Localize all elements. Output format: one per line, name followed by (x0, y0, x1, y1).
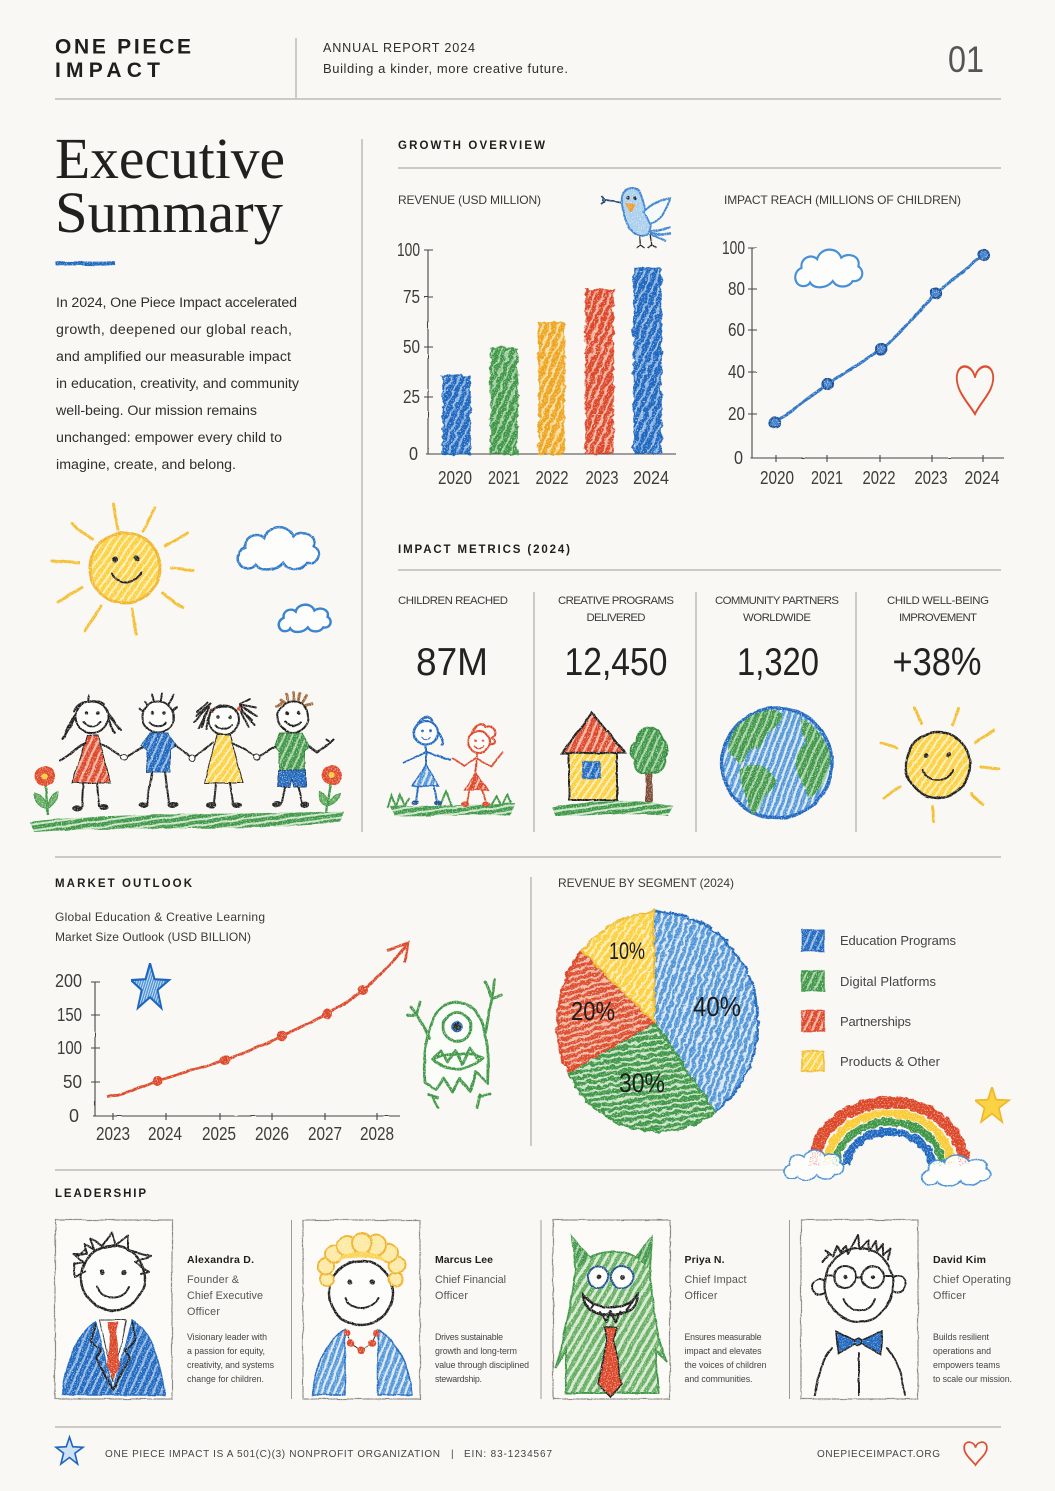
portrait: David (801, 1220, 918, 1399)
axis labels: 2027 (308, 1124, 342, 1144)
icon: chart cloud (795, 250, 862, 287)
growth curve with arrow (107, 943, 408, 1097)
footer separator: | (451, 1449, 454, 1460)
heading: revenue by segment: REVENUE BY SEGMENT (2024) (558, 876, 734, 890)
metric: well-being improvement: CHILD WELL-BEING (887, 595, 989, 607)
executive summary paragraph: in education, creativity, and community (56, 376, 300, 392)
icon: house and tree (552, 713, 673, 816)
axis labels: 100 (57, 1038, 82, 1058)
legend: Partnerships (840, 1014, 912, 1029)
metric: community partners: COMMUNITY PARTNERS (715, 595, 839, 607)
axis labels (55, 971, 394, 1144)
metric: children reached: CHILDREN REACHED (398, 595, 508, 607)
axis labels: 2028 (360, 1124, 394, 1144)
line chart: market outlook (55, 943, 408, 1144)
illustration: children holding hands (30, 692, 345, 832)
axis labels: 2024 (148, 1124, 182, 1144)
pie percentages (571, 938, 741, 1098)
metric: creative programs delivered: CREATIVE PROGRAMS (558, 595, 674, 607)
bars (443, 269, 661, 454)
market chart subtitle: Market Size Outlook (USD BILLION) (55, 930, 251, 944)
icon: smiling sun (52, 504, 193, 634)
organisation logo wordmark: IMPACT (55, 59, 160, 82)
metric: creative programs delivered: DELIVERED (586, 612, 646, 624)
text: David: Builds resilient (933, 1332, 990, 1342)
pie slices (557, 912, 758, 1131)
icon: blue star (131, 963, 169, 1008)
axis labels: 2024 (964, 468, 1000, 488)
leader card: Priya N. (553, 1220, 767, 1399)
organisation logo wordmark (55, 36, 191, 82)
heading: market outlook: MARKET OUTLOOK (55, 878, 193, 890)
footer website: ONEPIECEIMPACT.ORG (817, 1449, 940, 1460)
text: Alexandra: Founder & (187, 1274, 240, 1286)
executive summary paragraph: growth, deepened our global reach, (56, 322, 292, 338)
axis labels: 80 (728, 279, 745, 299)
axis labels: 0 (409, 444, 418, 464)
pie chart: revenue by segment (557, 912, 758, 1131)
report subtitle: ANNUAL REPORT 2024 (323, 41, 475, 55)
axis labels: 2024 (633, 468, 669, 488)
axis labels: 2020 (438, 468, 472, 488)
axis labels: 2023 (586, 468, 618, 488)
report subtitle: Building a kinder, more creative future. (323, 61, 568, 76)
axis labels: 60 (728, 320, 745, 340)
axes (424, 250, 676, 454)
metric: community partners: 1,320 (737, 641, 819, 684)
text: Alexandra (187, 1254, 275, 1384)
text: Marcus: stewardship. (435, 1374, 482, 1384)
market chart subtitle: Global Education & Creative Learning (55, 910, 265, 924)
pie percentages: 40% (693, 991, 741, 1022)
text: Priya: Officer (684, 1290, 718, 1302)
metric: creative programs delivered (552, 595, 674, 816)
text: Marcus: growth and long-term (435, 1346, 517, 1356)
axis labels: 2021 (488, 468, 520, 488)
icon: one-eyed green monster (407, 980, 502, 1107)
icon: rainbow clouds (784, 1150, 990, 1186)
icon: two stick children on grass (388, 717, 515, 816)
metric: community partners (715, 595, 839, 818)
axis labels: 0 (69, 1106, 79, 1126)
legend (802, 930, 956, 1071)
axis labels: 2020 (760, 468, 794, 488)
icon: footer star (56, 1437, 83, 1464)
axis labels: 75 (403, 287, 420, 307)
child two in blue shirt (125, 694, 192, 808)
text: Alexandra: change for children. (187, 1374, 264, 1384)
axis labels: 100 (722, 238, 745, 258)
child three in yellow dress (193, 699, 257, 808)
text: Marcus (435, 1254, 529, 1384)
axis labels: 150 (57, 1005, 82, 1025)
text: David: David Kim (933, 1254, 986, 1266)
executive summary paragraph: unchanged: empower every child to (56, 430, 282, 446)
icon: blue bird (601, 188, 671, 248)
icon: large cloud (238, 527, 319, 570)
metric: well-being improvement: IMPROVEMENT (899, 612, 977, 624)
footer EIN: EIN: 83-1234567 (464, 1449, 552, 1460)
axis labels: 25 (403, 387, 420, 407)
child four in green shirt (257, 692, 333, 808)
header (55, 36, 984, 98)
icon: small cloud (279, 605, 331, 632)
grass strip (30, 811, 345, 832)
text: Priya: impact and elevates (684, 1346, 762, 1356)
pie percentages: 20% (571, 996, 615, 1026)
text: David: to scale our mission. (933, 1374, 1012, 1384)
title (55, 126, 285, 245)
axis labels: 200 (55, 971, 82, 991)
legend: Digital Platforms (840, 974, 936, 989)
text: David: Chief Operating (933, 1274, 1011, 1286)
text: Marcus: Marcus Lee (435, 1254, 493, 1266)
text: Priya (684, 1254, 767, 1384)
icon: red heart (957, 366, 993, 414)
axis labels: 2023 (96, 1124, 130, 1144)
axis labels (397, 240, 669, 488)
heading: impact metrics: IMPACT METRICS (2024) (398, 544, 570, 556)
heading: leadership: LEADERSHIP (55, 1188, 146, 1200)
axis labels (722, 238, 1000, 488)
text: David: Officer (933, 1290, 966, 1302)
text: David: operations and (933, 1346, 991, 1356)
data line (770, 250, 989, 428)
portrait: Alexandra (55, 1220, 172, 1399)
axis labels: 2022 (536, 468, 568, 488)
title: Summary (55, 180, 283, 245)
axes (748, 248, 1004, 462)
executive summary paragraph (55, 295, 300, 473)
title: Executive (55, 126, 285, 191)
heading: growth overview: GROWTH OVERVIEW (398, 140, 545, 152)
chart title: revenue: REVENUE (USD MILLION) (398, 193, 541, 207)
icon: yellow star (975, 1087, 1009, 1122)
text: Marcus: value through disciplined (435, 1360, 529, 1370)
icon: sun with black outline (881, 708, 999, 822)
organisation logo wordmark: ONE PIECE (55, 36, 191, 58)
icon: footer heart (964, 1442, 987, 1465)
text: Alexandra: Officer (187, 1306, 220, 1318)
legend: Education Programs (840, 933, 956, 948)
page number: 01 (948, 39, 984, 80)
pie percentages: 10% (609, 938, 645, 965)
axis labels: 50 (403, 337, 420, 357)
text: Marcus: Chief Financial (435, 1274, 506, 1286)
executive summary paragraph: imagine, create, and belong. (56, 457, 236, 473)
text: Priya: Ensures measurable (684, 1332, 762, 1342)
executive summary paragraph: In 2024, One Piece Impact accelerated (56, 295, 297, 311)
market chart subtitle (55, 910, 265, 944)
child one in red dress (60, 695, 123, 811)
axis labels: 20 (728, 404, 745, 424)
icon: rainbow with clouds (814, 1102, 964, 1165)
metric: children reached (388, 595, 515, 816)
metric: children reached: 87M (416, 641, 488, 684)
axis labels: 40 (728, 362, 745, 382)
text: David (933, 1254, 1012, 1384)
text: Priya: and communities. (684, 1374, 752, 1384)
axis labels: 2025 (202, 1124, 236, 1144)
text: Marcus: Officer (435, 1290, 468, 1302)
text: David: empowers teams (933, 1360, 1001, 1370)
text: Priya: Chief Impact (684, 1274, 746, 1286)
leader card: Marcus Lee (303, 1220, 529, 1399)
icon: globe (722, 708, 832, 818)
pie percentages: 30% (619, 1068, 665, 1098)
footer (56, 1437, 987, 1465)
leader card: Alexandra D. (55, 1220, 275, 1399)
text: Priya: the voices of children (684, 1360, 767, 1370)
metric: well-being improvement: +38% (892, 641, 982, 684)
flowers (34, 765, 342, 815)
metric: creative programs delivered: 12,450 (564, 641, 668, 684)
leader card: David Kim (801, 1220, 1012, 1399)
footer legal text: ONE PIECE IMPACT IS A 501(C)(3) NONPROFIT ORGANIZATION (105, 1449, 440, 1460)
metric: community partners: WORLDWIDE (743, 612, 811, 624)
line chart: impact reach (722, 238, 1004, 488)
text: Alexandra: Chief Executive (187, 1290, 263, 1302)
bar chart: revenue (397, 240, 676, 488)
portrait: Priya as green monster (553, 1220, 670, 1399)
metric: well-being improvement (881, 595, 999, 822)
axis labels: 2023 (914, 468, 948, 488)
chart title: impact reach: IMPACT REACH (MILLIONS OF CHILDREN) (724, 193, 961, 207)
portrait: Marcus (303, 1220, 420, 1399)
axis labels: 50 (63, 1072, 82, 1092)
text: Alexandra: Alexandra D. (187, 1254, 254, 1266)
text: Alexandra: Visionary leader with (187, 1332, 267, 1342)
text: Alexandra: creativity, and systems (187, 1360, 275, 1370)
title underline crayon stroke (55, 263, 115, 264)
axes (91, 982, 400, 1120)
axis labels: 2021 (811, 468, 843, 488)
executive summary paragraph: well-being. Our mission remains (55, 403, 257, 419)
axis labels: 2022 (862, 468, 896, 488)
text: Marcus: Drives sustainable (435, 1332, 503, 1342)
legend: Products & Other (840, 1054, 941, 1069)
axis labels: 0 (734, 448, 743, 468)
text: Alexandra: a passion for equity, (187, 1346, 265, 1356)
text: Priya: Priya N. (684, 1254, 725, 1266)
executive summary paragraph: and amplified our measurable impact (56, 349, 291, 365)
axis labels: 2026 (255, 1124, 289, 1144)
axis labels: 100 (397, 240, 420, 260)
report subtitle (323, 41, 568, 76)
